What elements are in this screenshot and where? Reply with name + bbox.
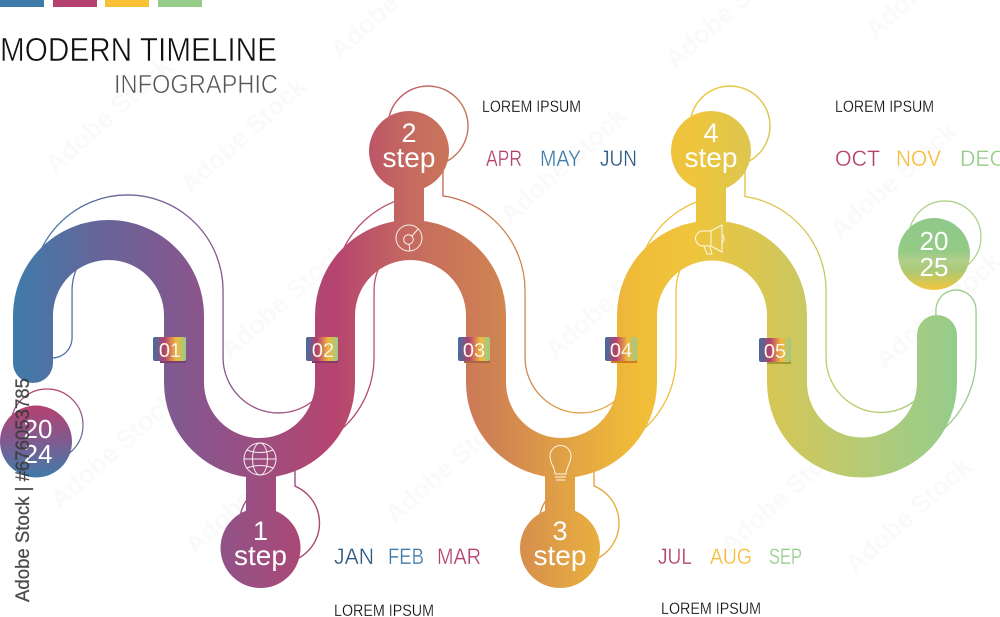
watermark pattern: Adobe Stock: [214, 235, 353, 364]
months: Jul to Sep with label: JUL: [658, 544, 692, 569]
watermark pattern: Adobe Stock: [44, 385, 183, 514]
vertical stock credit: Adobe Stock | #676053785: [12, 378, 34, 602]
tag 02: 02: [312, 340, 334, 362]
months: Oct to Dec with label: OCT: [835, 146, 880, 171]
watermark pattern: Adobe Stock: [824, 115, 963, 244]
months: Jul to Sep with label: SEP: [769, 544, 802, 569]
title: MODERN TIMELINE: [0, 32, 277, 69]
months: Jan to Mar with label: MAR: [437, 544, 481, 569]
months: Jan to Mar with label: [334, 544, 481, 617]
watermark pattern: Adobe Stock: [494, 100, 633, 229]
year 2024 badge: [0, 406, 72, 478]
timeline band: [33, 240, 937, 458]
tag 05: 05: [764, 341, 786, 363]
year 2024 badge: 24: [24, 439, 52, 469]
step 2 node: 2: [401, 118, 417, 148]
year 2025 badge: [898, 218, 970, 290]
months: Oct to Dec with label: NOV: [896, 146, 941, 171]
tag 02: [306, 337, 338, 363]
months: Apr to Jun with label: [482, 98, 637, 171]
watermark pattern: Adobe Stock: [714, 430, 853, 559]
tag 03: 03: [463, 340, 485, 362]
months: Jan to Mar with label: JAN: [334, 544, 374, 569]
step 4 node: 4: [703, 118, 719, 148]
tag 01: 01: [159, 340, 181, 362]
months: Jan to Mar with label: FEB: [388, 544, 424, 569]
year 2025 badge: 20: [920, 226, 948, 256]
icon: globe: [244, 443, 276, 475]
2024 outline ring: [11, 389, 83, 461]
step 1 node: [220, 470, 300, 588]
months: Jul to Sep with label: [658, 544, 802, 617]
icon: target dial: [396, 225, 422, 251]
step 3 node: 3: [552, 516, 568, 546]
watermark pattern: Adobe Stock: [39, 50, 178, 179]
icon: light bulb: [550, 446, 571, 480]
year 2025 badge: 25: [920, 252, 948, 282]
icon: megaphone: [696, 225, 724, 254]
step 2 node: step: [383, 142, 435, 173]
months: Apr to Jun with label: MAY: [540, 146, 581, 171]
step 2 node: [369, 111, 449, 225]
colour legend bars: [0, 0, 202, 7]
months: Oct to Dec with label: LOREM IPSUM: [835, 98, 934, 116]
tag 05: [759, 338, 791, 364]
months: Oct to Dec with label: [835, 98, 1000, 171]
offset thin outline of the timeline: [52, 85, 956, 564]
watermark pattern: Adobe Stock: [174, 70, 313, 199]
step 1 node: 1: [253, 516, 268, 546]
watermark pattern: Adobe Stock: [379, 400, 518, 529]
subtitle: INFOGRAPHIC: [114, 69, 278, 99]
months: Apr to Jun with label: LOREM IPSUM: [482, 98, 581, 116]
tag 04: [605, 337, 637, 363]
step 4 node: [671, 111, 751, 225]
months: Apr to Jun with label: APR: [486, 146, 522, 171]
2025 outline ring: [909, 201, 981, 273]
watermark pattern: Adobe Stock: [839, 450, 978, 579]
tag 04: 04: [610, 340, 632, 362]
months: Jul to Sep with label: AUG: [710, 544, 752, 569]
step 4 node: step: [685, 142, 737, 173]
step 3 node: step: [534, 540, 586, 571]
year 2024 badge: 20: [24, 414, 52, 444]
tag 01: [153, 337, 186, 363]
step 3 node: [520, 470, 600, 588]
watermark pattern: Adobe Stock: [539, 235, 678, 364]
tag 03: [458, 337, 490, 363]
step 1 node: step: [234, 540, 287, 571]
months: Apr to Jun with label: JUN: [600, 146, 637, 171]
watermark pattern: Adobe Stock: [179, 430, 318, 559]
